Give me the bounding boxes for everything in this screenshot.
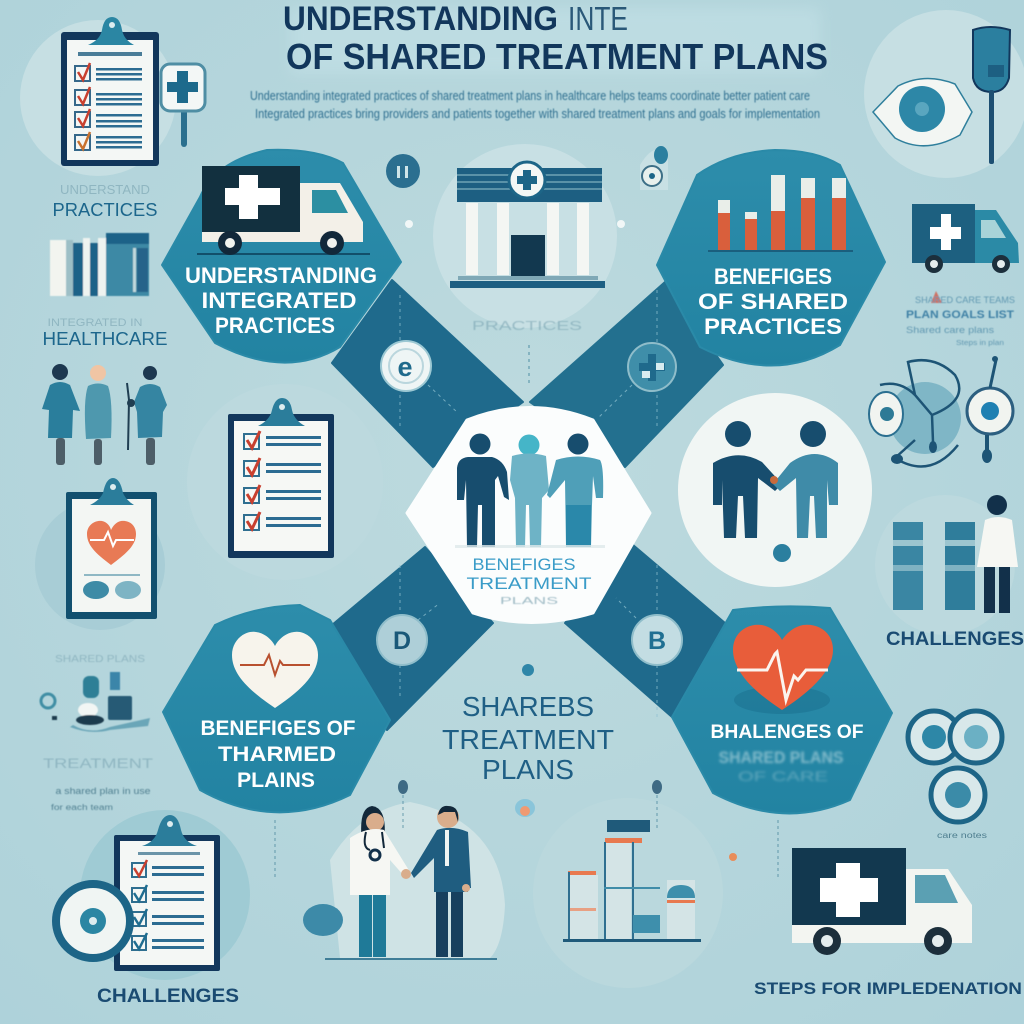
icon: ambulance right — [912, 204, 1019, 273]
left label: healthcare — [42, 317, 168, 349]
icon: ring trio bottom-right — [908, 711, 1002, 840]
icon: band badge top-left — [381, 341, 431, 391]
icon: top-right eye with IV bag — [864, 10, 1024, 178]
panel: understanding integrated practices — [162, 150, 401, 363]
hexagon text: TREATMENT — [466, 574, 592, 593]
text block: faint right notes: PLAN GOALS LIST — [906, 309, 1014, 321]
label: challenges right: CHALLENGES — [886, 629, 1024, 650]
bar chart — [708, 175, 853, 252]
hexagon text: PLAINS — [237, 769, 315, 792]
text block: faint treatment note — [43, 755, 154, 812]
subtitle — [250, 88, 820, 121]
text block: faint treatment note: TREATMENT — [43, 755, 154, 771]
panel: two people shaking hands — [678, 393, 872, 587]
icon: hospital building — [433, 144, 617, 328]
hexagon text: BENEFIGES OF — [200, 717, 356, 740]
icon: clipboard with heart — [35, 478, 165, 630]
icon: band badge bottom-left — [377, 615, 427, 665]
icon: band badge bottom-left: D — [393, 627, 411, 655]
left label: practices: PRACTICES — [52, 200, 158, 220]
hexagon text: PRACTICES — [704, 314, 842, 339]
connector: dotted lines below hexagons — [275, 795, 778, 880]
text block: faint right notes — [906, 291, 1015, 347]
hexagon text: INTEGRATED — [202, 288, 356, 313]
title: INTE — [568, 0, 628, 37]
hexagon text: PLANS — [500, 596, 559, 607]
hexagon text — [466, 555, 592, 607]
icon: three healthcare workers — [42, 364, 167, 465]
icon: top-left clipboard with plus sign — [20, 17, 205, 176]
label: challenges bottom-left: CHALLENGES — [97, 986, 239, 1007]
icon: small markers around bottom center — [398, 780, 737, 861]
panel: challenges of shared plans — [672, 606, 892, 813]
icon: ring trio bottom-right: care notes — [937, 831, 987, 840]
icon: small badges above building — [386, 146, 668, 190]
text block: faint right notes: Steps in plan — [956, 340, 1004, 347]
text block: faint treatment note: for each team — [51, 803, 113, 812]
icon: bottom-left clipboard with target — [56, 810, 250, 980]
text block: faint right notes: SHARED CARE TEAMS — [915, 295, 1015, 305]
hexagon text: THARMED — [218, 743, 336, 766]
icon: decorative dots and faint label under building — [405, 220, 625, 385]
hexagon text: OF CARE — [738, 768, 828, 784]
hexagon text — [185, 263, 377, 338]
icon: hospital shelves — [533, 798, 723, 988]
text block: faint treatment note: a shared plan in use — [56, 786, 150, 796]
heading: shared treatment plans — [442, 691, 614, 785]
panel: connecting X bands — [332, 280, 725, 730]
label: steps for implementation: STEPS FOR IMPLEDENATION — [754, 979, 1022, 998]
text block: faint right notes: Shared care plans — [906, 325, 995, 335]
hexagon text: PRACTICES — [215, 313, 335, 338]
panel: benefits of tharmed plans — [163, 605, 390, 812]
icon: blue dot above heading — [522, 664, 534, 676]
panel: clipboard checklist — [187, 384, 383, 580]
hexagon text — [710, 722, 864, 784]
panel: central hexagon with team — [407, 408, 650, 622]
icon: medical equipment: SHARED PLANS — [55, 654, 145, 665]
icon: band badge bottom-right — [632, 615, 682, 665]
hexagon text: BENEFIGES — [472, 555, 576, 574]
hexagon text: UNDERSTANDING — [185, 263, 377, 288]
icon: decorative dots and faint label under building: PRACTICES — [472, 318, 582, 333]
heading: shared treatment plans: SHAREBS — [462, 691, 594, 722]
icon: binders on shelf — [50, 233, 149, 296]
icon: right doctor and binders — [875, 495, 1018, 635]
heading: shared treatment plans: PLANS — [482, 754, 574, 785]
panel: benefits of shared practices — [657, 150, 885, 366]
hexagon text — [698, 264, 848, 339]
heading: shared treatment plans: TREATMENT — [442, 724, 614, 755]
icon: band badge top-right — [628, 343, 676, 391]
icon: medical equipment — [41, 654, 150, 732]
icon: band badge bottom-right: B — [648, 627, 666, 655]
icon: stethoscope with eyes — [869, 356, 1013, 466]
icon: red heart — [733, 625, 833, 714]
connector: dotted lines over bands — [400, 290, 657, 720]
icon: white heart — [232, 632, 318, 708]
left label: practices: UNDERSTAND — [60, 182, 150, 197]
icon: three people holding hands — [455, 434, 605, 548]
icon: ambulance bottom-right — [792, 848, 972, 955]
left label: healthcare: HEALTHCARE — [42, 329, 168, 349]
hexagon text: BHALENGES OF — [710, 722, 864, 743]
subtitle: Integrated practices bring providers and patients together with shared treatment plans and goals for implementation — [255, 106, 820, 121]
title: UNDERSTANDING — [283, 0, 558, 38]
left label: practices — [52, 182, 158, 220]
hexagon text — [200, 717, 356, 792]
subtitle: Understanding integrated practices of shared treatment plans in healthcare helps teams coordinate better patient care — [250, 88, 810, 103]
title: OF SHARED TREATMENT PLANS — [286, 36, 828, 77]
hexagon text: SHARED PLANS — [718, 748, 844, 767]
hexagon text: BENEFIGES — [714, 264, 832, 289]
icon: ambulance — [197, 166, 370, 255]
hexagon text: OF SHARED — [698, 289, 848, 314]
left label: healthcare: INTEGRATED IN — [48, 317, 143, 329]
title — [283, 0, 828, 77]
icon: doctor and patient shaking hands — [303, 802, 505, 960]
icon: band badge top-left: e — [397, 352, 413, 382]
